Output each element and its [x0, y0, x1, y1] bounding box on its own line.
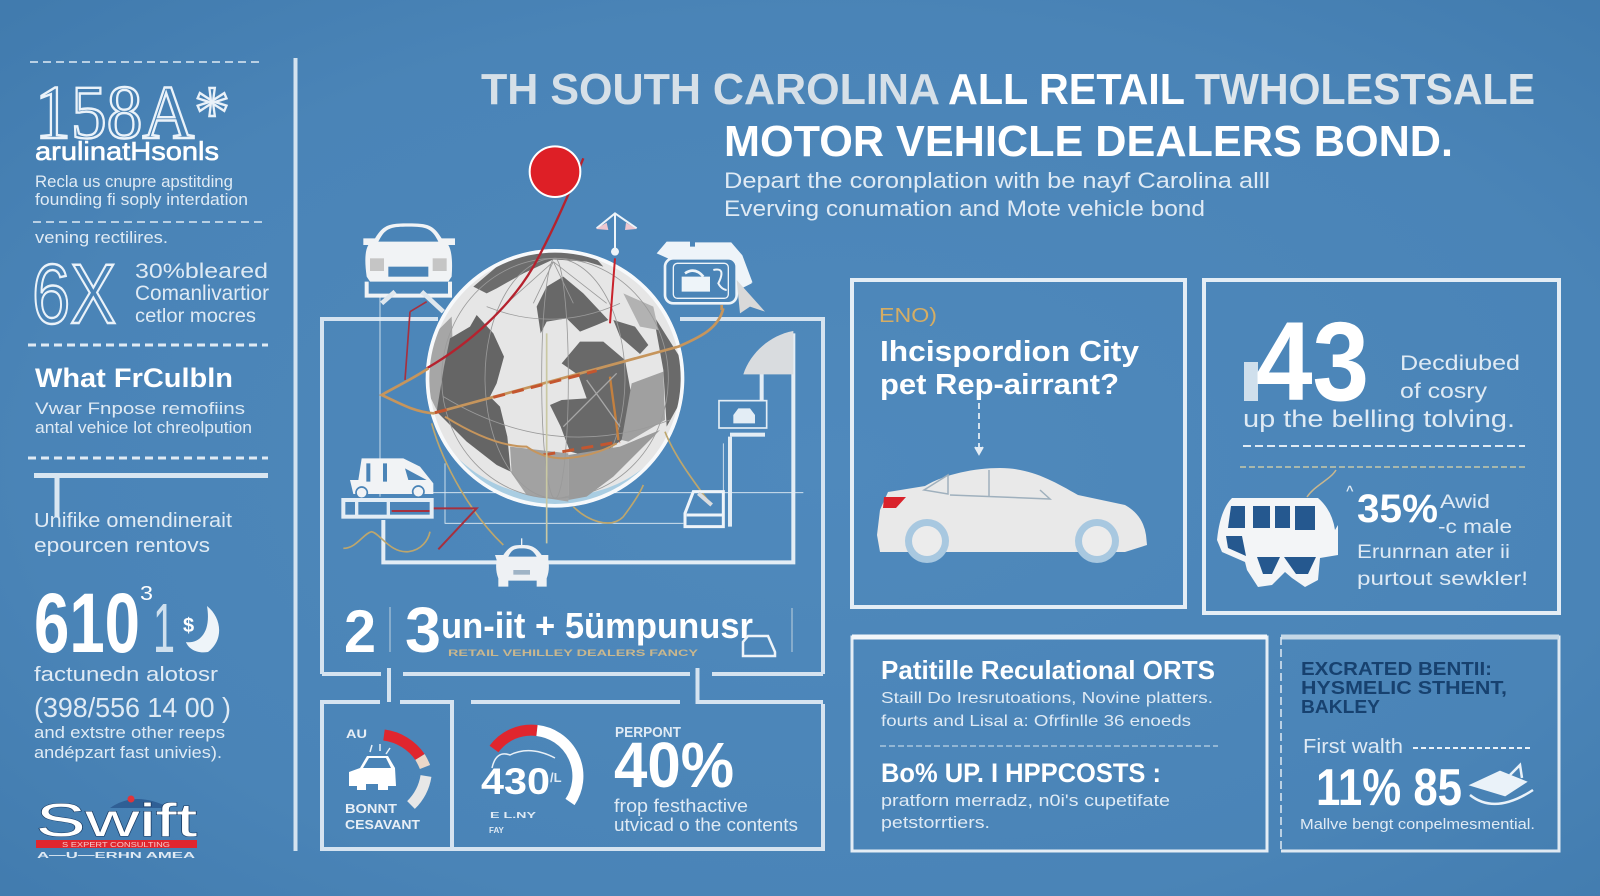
subtitle: Depart the coronplation with be nayf Carolina alll: [724, 168, 1270, 193]
statistic: 40%: PERPONT: [615, 725, 681, 741]
35% description: Erunrnan ater ii: [1357, 542, 1510, 563]
paragraph: [881, 690, 1213, 730]
heading: Patitille Reculational ORTS: [881, 655, 1215, 685]
gauge: 430: [481, 730, 578, 835]
large statistic 610: 1: [153, 589, 175, 667]
stat label: arulinatHsonls: [35, 136, 219, 166]
statistic: 40%: [614, 725, 798, 835]
subtitle: Everving conumation and Mote vehicle bond: [724, 196, 1205, 221]
icon: hand and coin: $: [183, 615, 194, 637]
statistic: 40%: frop festhactive: [614, 796, 748, 816]
35% description: [1357, 492, 1528, 590]
gauge labels: CESAVANT: [345, 818, 420, 832]
logo: Swift: A—U—ERHN AMEA: [37, 851, 195, 860]
subtitle: [724, 168, 1270, 221]
statistic: 11% 85: 11% 85: [1316, 759, 1462, 817]
icon: front-view car on lift: [363, 223, 455, 312]
title: ALL RETAIL: [948, 65, 1185, 114]
paragraph: pratforn merradz, n0i's cupetifate: [881, 792, 1170, 810]
bond count text: un-iit + 5ümpunusr: [441, 605, 753, 646]
panel: globe illustration frame: [322, 146, 823, 702]
stat description: [35, 173, 248, 247]
statistic: 35%: ^: [1346, 483, 1354, 498]
35% description: -c male: [1438, 517, 1512, 538]
title: TH SOUTH CAROLINA: [481, 65, 940, 114]
network illustration: [343, 146, 803, 587]
eyebrow: ENO): [879, 305, 937, 327]
contact text: [34, 664, 231, 762]
heading: Bo% UP. I HPPCOSTS :: [881, 758, 1161, 788]
gauge labels: [345, 727, 420, 832]
icon: small bar graphic: [1244, 362, 1258, 401]
icon: fin shape: [743, 331, 793, 374]
bond count text: 3: [405, 594, 441, 666]
caption: Mallve bengt conpelmesmential.: [1300, 816, 1535, 833]
icon: monitor with car: [719, 401, 767, 437]
gauge: 430: 430: [481, 761, 550, 802]
large statistic 610: 610: [34, 576, 140, 670]
title: MOTOR VEHICLE DEALERS BOND.: [724, 117, 1453, 166]
title: [481, 65, 1535, 166]
bond count text: [344, 594, 792, 666]
35% description: Awid: [1440, 492, 1490, 513]
icon: sedan car: [877, 468, 1147, 563]
vertical divider: [294, 58, 298, 851]
6X description: [135, 260, 269, 327]
outer frame: [322, 319, 823, 674]
panel: bond gauge: [322, 702, 823, 849]
sidebar heading: What FrCulbln: [35, 363, 233, 393]
icon: money tray: [1470, 765, 1533, 804]
dark heading: [1301, 659, 1507, 717]
gauge labels: AU: [346, 727, 367, 741]
title: TWHOLESTSALE: [1195, 65, 1535, 114]
icon: device with vehicle: [657, 242, 765, 313]
sidebar paragraph: Vwar Fnpose remofiins: [35, 399, 245, 418]
panel: excrated benefit: [1281, 637, 1559, 851]
paragraph: Staill Do Iresrutoations, Novine platters.: [881, 690, 1213, 707]
6X description: cetlor mocres: [135, 306, 256, 327]
question heading: Ihcispordion City: [880, 336, 1139, 368]
gauge: 430: FAY: [489, 826, 504, 835]
stat description: founding fi soply interdation: [35, 191, 248, 209]
icon: bus: [1217, 498, 1338, 587]
sidebar paragraph: epourcen rentovs: [34, 535, 210, 557]
panel: left sidebar statistics: [28, 62, 269, 860]
sidebar paragraph: Unifike omendinerait: [34, 510, 232, 532]
icon: up arrow: [596, 213, 637, 255]
statistic description: of cosry: [1400, 380, 1488, 403]
dashed arrow: [975, 403, 983, 454]
stat description: vening rectilires.: [35, 229, 168, 247]
contact text: and extstre other reeps: [34, 724, 225, 742]
gauge: small: [384, 735, 426, 805]
question heading: pet Rep-airrant?: [880, 369, 1119, 401]
icon: red location dot: [530, 146, 580, 197]
paragraph: [881, 792, 1170, 832]
paragraph: petstorrtiers.: [881, 814, 990, 832]
statistic: 35%: 35%: [1357, 487, 1438, 531]
6X description: 30%bleared: [135, 260, 268, 283]
first wealth line: First walth: [1303, 736, 1403, 758]
statistic description: [1243, 352, 1520, 433]
panel: regulational costs: [852, 637, 1267, 851]
outlined statistic 1508A: 158A*: [35, 71, 230, 155]
logo: Swift: Swift: [36, 794, 197, 846]
panel: 43 statistics: [1204, 280, 1559, 613]
globe: [425, 249, 684, 508]
dark heading: BAKLEY: [1301, 697, 1380, 717]
sidebar paragraph: antal vehice lot chreolpution: [35, 418, 252, 437]
contact text: (398/556 14 00 ): [34, 692, 231, 723]
gauge: 430: E L.NY: [490, 811, 537, 820]
outlined statistic 6X: 6X: [32, 247, 116, 341]
icon: car with signal: [349, 744, 396, 790]
stat description: Recla us cnupre apstitding: [35, 173, 233, 191]
paragraph: fourts and Lisal a: Ofrfinlle 36 enoeds: [881, 713, 1191, 730]
logo: Swift: [36, 794, 197, 860]
panel: city question with car: [852, 280, 1185, 607]
statistic description: Decdiubed: [1400, 352, 1520, 375]
statistic description: up the belling tolving.: [1243, 406, 1515, 433]
gauge: 430: /L: [550, 770, 562, 785]
icon: laptop: [685, 492, 723, 527]
dark heading: EXCRATED BENTII:: [1301, 659, 1492, 679]
icon: hand and coin: [183, 606, 219, 652]
bracket rule: [34, 476, 268, 517]
6X description: Comanlivartior: [135, 282, 269, 305]
contact text: andépzart fast univies).: [34, 744, 222, 762]
statistic: 40%: utvicad o the contents: [614, 815, 798, 835]
bond count text: 2: [344, 598, 376, 665]
sidebar paragraph: [34, 510, 232, 557]
large statistic 610: 3: [140, 583, 153, 605]
statistic: 43: 43: [1256, 299, 1369, 424]
statistic: 40%: 40%: [614, 729, 734, 801]
question heading: [880, 336, 1139, 401]
route lines: [343, 158, 723, 552]
connectors: [389, 668, 823, 702]
contact text: factunedn alotosr: [34, 664, 218, 686]
icon: delivery truck: [343, 458, 433, 517]
dark heading: HYSMELIC STHENT,: [1301, 678, 1507, 698]
inner network lines: [380, 297, 803, 562]
35% description: purtout sewkler!: [1357, 569, 1528, 590]
sidebar paragraph: [35, 399, 252, 437]
icon: small front car: [495, 538, 549, 587]
gauge labels: BONNT: [345, 802, 397, 816]
logo: Swift: S EXPERT CONSULTING: [62, 842, 170, 849]
bond count text: RETAIL VEHILLEY DEALERS FANCY: [448, 648, 699, 659]
